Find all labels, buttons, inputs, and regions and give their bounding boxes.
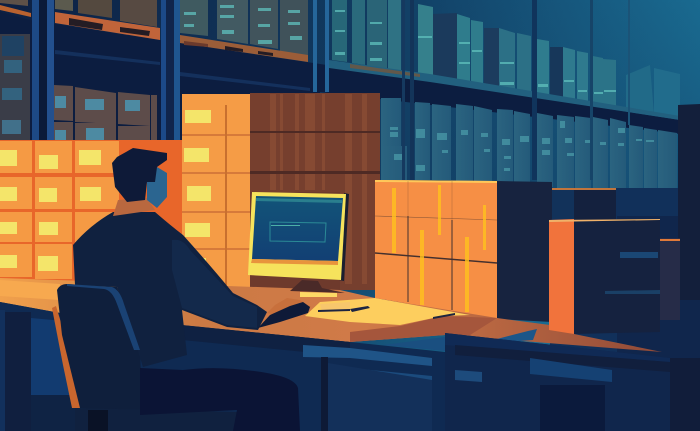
hair [112,148,167,202]
lower shelf boxes: right teal [381,98,677,188]
central box stack [182,93,380,290]
face [147,167,167,208]
box seams [375,181,497,310]
hand [267,298,311,315]
monitor stand [290,280,345,293]
right lit box stack [375,180,616,322]
orange box wall, left [0,140,183,290]
monitor [248,192,349,293]
lower shelf boxes: left brown [0,34,157,140]
shelf pallet rails [0,5,680,120]
office chair [52,284,240,431]
desk front [0,302,700,431]
desk top [0,278,662,352]
neck [113,198,155,216]
torso [73,212,267,367]
upper shelf boxes [0,0,680,118]
desk paper and pen [318,302,455,319]
steel uprights [32,0,630,180]
wall labels [0,150,101,271]
shelf labels [184,5,616,94]
sleeve highlight [172,240,257,328]
shelf shadow band [0,12,680,140]
man at desk [67,148,311,431]
floor and far boxes, right side [550,104,700,360]
box on desk, right [549,219,660,334]
light streaks [392,185,486,312]
background darkening toward floor [0,0,700,190]
legs [140,368,300,431]
chair rim [67,284,140,350]
lower shelf labels [390,121,654,171]
